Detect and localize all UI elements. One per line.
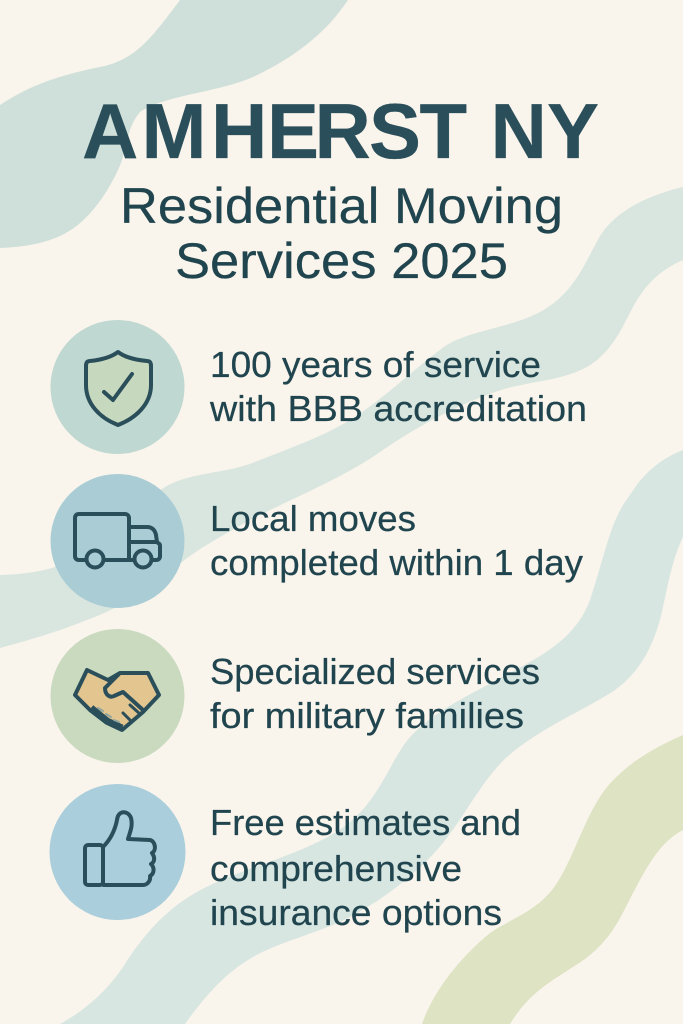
item: local moves: [50, 474, 583, 608]
text: service and accreditation: with BBB accreditation: [209, 388, 587, 429]
text: local moves: Local moves: [210, 498, 416, 539]
title: [82, 87, 599, 289]
text: military families: for military families: [210, 695, 524, 736]
background wave: green corner: [422, 735, 683, 1024]
text: free estimates and insurance: insurance options: [210, 892, 502, 933]
item: free estimates: [50, 784, 521, 933]
text: free estimates and insurance: Free estimates and: [210, 802, 521, 843]
text: local moves: completed within 1 day: [210, 542, 583, 583]
text: free estimates and insurance: [210, 802, 521, 933]
icon: handshake: [50, 629, 184, 763]
background wave: top left: [0, 0, 348, 248]
text: military families: [210, 651, 540, 736]
text: military families: Specialized services: [210, 651, 540, 692]
text: service and accreditation: [209, 344, 587, 429]
text: free estimates and insurance: comprehensive: [210, 848, 462, 889]
text: service and accreditation: 100 years of service: [210, 344, 541, 385]
icon: shield with checkmark: [50, 320, 184, 454]
icon: thumbs up: [50, 784, 186, 920]
subtitle: Residential Moving: [120, 178, 563, 234]
background wave: lower: [60, 450, 683, 1024]
item: 100 years of service: [50, 320, 587, 454]
subtitle: [120, 178, 563, 289]
title: AMHERST NY: [82, 87, 599, 175]
background wave: middle: [0, 187, 683, 648]
text: local moves: [210, 498, 583, 583]
icon: moving truck: [50, 474, 184, 608]
subtitle: Services 2025: [175, 233, 508, 289]
item: military families: [50, 629, 540, 763]
